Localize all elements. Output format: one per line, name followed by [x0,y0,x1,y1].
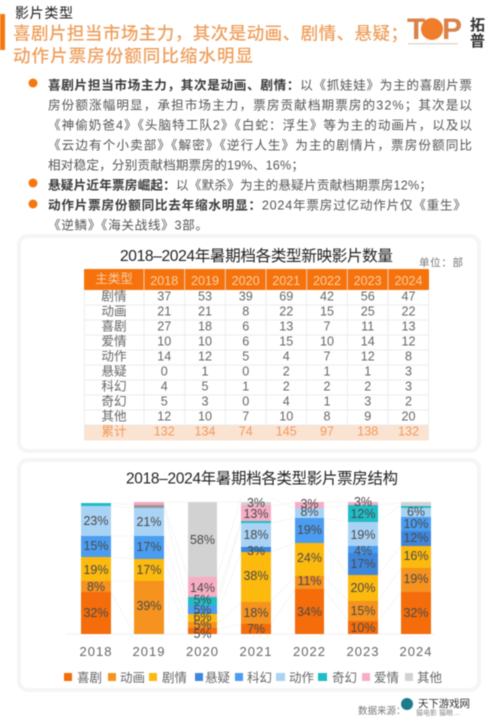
label: unit: 单位：部 [419,256,463,269]
axis: year labels [80,644,432,659]
table: film counts by genre and year: 3 [405,380,412,394]
table: film counts by genre and year: 2 [405,394,412,408]
table: film counts by genre and year: 2 [364,380,371,394]
table: film counts by genre and year: 11 [361,320,374,334]
text block: key findings: 动作片票房份额同比去年缩水明显：2024年票房过亿动作片仅《重生》 [48,198,466,212]
text block: key findings: 《神偷奶爸4》《头脑特工队2》《白蛇：浮生》等为主的动画片，以及以 [48,118,472,132]
table: film counts by genre and year: 15 [320,304,334,318]
table: film counts by genre and year: 其他 [101,410,127,424]
table: film counts by genre and year: 145 [276,424,297,438]
data labels: 14% [190,581,215,595]
data labels: 18% [243,528,269,542]
table: film counts by genre and year: 2020 [232,274,260,288]
table: film counts by genre and year: 9 [364,410,371,424]
table: film counts by genre and year: 悬疑 [101,364,127,378]
table: film counts by genre and year: 5 [242,350,249,364]
table: film counts by genre and year: 8 [405,350,412,364]
table: film counts by genre and year: 37 [157,290,171,304]
table: film counts by genre and year: 138 [357,424,378,438]
table: film counts by genre and year: 25 [361,304,375,318]
table: film counts by genre and year: 1 [323,394,331,408]
table: film counts by genre and year: 主类型 [95,272,133,286]
axis: year labels: 2022 [293,644,326,659]
bar: 2022 [295,502,324,634]
axis: year labels: 2021 [240,644,272,659]
bar: 2023 [348,502,378,634]
panel: box office structure chart [19,460,479,690]
data labels: 3% [354,495,372,509]
data labels: 19% [403,572,429,586]
legend: 爱情 [374,671,399,685]
data labels: 17% [350,557,376,571]
data labels: 32% [403,606,429,620]
header: page title block [0,5,408,66]
table: film counts by genre and year: 20 [401,410,416,424]
bar: 2021 [241,502,271,634]
bar: 2019 [134,502,164,634]
text block: key findings: 相对稳定，分别贡献档期票房的19%、16%； [48,158,304,174]
table: film counts by genre and year: 喜剧 [101,320,127,334]
data labels: 10% [403,517,429,531]
data labels: 5% [193,593,212,607]
data labels: 4% [354,544,372,558]
source note and watermark [358,697,470,717]
table: film counts by genre and year: 8 [323,410,331,424]
axis: year labels: 2019 [133,644,165,659]
table: film counts by genre and year: 12 [157,410,171,424]
table: film counts by genre and year: 0 [242,364,249,378]
table: film counts by genre and year: 2018 [150,274,178,288]
text block: key findings [28,78,472,232]
table: film counts by genre and year: 剧情 [101,290,127,304]
table: film counts by genre and year: 7 [323,350,331,364]
legend [64,670,443,685]
source note and watermark: 猫电影 猫眼… [416,708,460,717]
table: film counts by genre and year: 2 [283,380,290,394]
data labels: 58% [190,533,215,547]
data labels: 6% [193,610,212,624]
legend: 喜剧 [77,671,102,685]
table: film counts by genre and year: 10 [198,410,212,424]
table: film counts by genre and year: 74 [239,424,253,438]
table: film counts by genre and year: 10 [198,334,212,348]
table: film counts by genre and year: 3 [201,394,209,408]
table: film counts by genre and year: 累计 [101,424,127,438]
table: film counts by genre and year: 2 [283,364,290,378]
data labels: 19% [297,523,322,537]
legend: 剧情 [162,671,187,685]
table: film counts by genre and year: 0 [242,394,249,408]
data labels: 16% [403,549,429,563]
header: page title block: 影片类型 [15,5,73,21]
table: film counts by genre and year: 1 [242,380,249,394]
bar: 2020 [188,502,217,634]
chart: stacked bars by year [66,495,435,659]
table: film counts by genre and year: 42 [320,290,334,304]
header: page title block: 动作片票房份额同比缩水明显 [13,46,253,66]
table: film counts by genre and year: 15 [279,334,293,348]
table: film counts by genre and year: 6 [242,334,249,348]
heading: chart title: 2018–2024年暑期档各类型影片票房结构 [126,470,398,488]
table: film counts by genre and year: 10 [157,334,171,348]
data labels: 34% [297,605,322,619]
table: film counts by genre and year: 6 [242,320,249,334]
axis: year labels: 2020 [186,644,219,659]
data labels: 8% [300,505,319,519]
data labels: 19% [83,563,109,577]
icon: TOP logo [407,13,485,50]
panel: new film count table [19,236,479,451]
table: film counts by genre and year: 3 [364,394,371,408]
table: film counts by genre and year: 0 [161,364,168,378]
legend: 动画 [120,671,145,685]
table: film counts by genre and year: 53 [198,290,212,304]
data labels: 15% [83,539,109,553]
table: film counts by genre and year: 动画 [101,304,127,318]
data labels: 23% [83,514,109,528]
text block: key findings: 喜剧片担当市场主力，其次是动画、剧情：以《抓娃娃》为主的喜剧片票 [48,78,472,92]
data labels: 39% [136,599,162,613]
data labels: 20% [350,581,376,595]
data labels: 3% [247,496,265,510]
table: film counts by genre and year [84,269,429,440]
table: film counts by genre and year: 132 [398,424,419,438]
table: film counts by genre and year: 8 [242,304,249,318]
table: film counts by genre and year: 2022 [313,274,341,288]
table: film counts by genre and year: 56 [361,290,375,304]
axis: year labels: 2023 [347,644,379,659]
table: film counts by genre and year: 134 [194,424,216,438]
data labels: 12% [350,507,376,521]
icon: TOP logo: 普 [470,32,485,50]
source note and watermark: 天下游戏网 [418,697,470,710]
header: page title block: 喜剧片担当市场主力，其次是动画、剧情、悬疑； [13,24,408,44]
table: film counts by genre and year: 12 [361,350,375,364]
table: film counts by genre and year: 7 [242,410,249,424]
table: film counts by genre and year: 13 [279,320,293,334]
data labels: 5% [193,627,212,641]
bar: 2024 [401,502,431,634]
icon: TOP logo: P [442,13,462,46]
legend: 悬疑 [205,670,231,685]
text block: key findings: 悬疑片近年票房崛起：以《默杀》为主的悬疑片贡献档期票房12%； [48,178,432,194]
data labels: 12% [403,531,429,545]
table: film counts by genre and year: 科幻 [101,380,127,394]
data labels: 17% [136,540,162,554]
table: film counts by genre and year: 27 [157,320,171,334]
table: film counts by genre and year: 10 [279,410,293,424]
data labels: 19% [350,528,376,542]
source note and watermark: 数据来源： [358,705,406,717]
table: film counts by genre and year: 12 [198,350,212,364]
legend: 其他 [417,671,443,685]
table: film counts by genre and year: 39 [239,290,253,304]
table: film counts by genre and year: 2021 [272,274,300,288]
axis: year labels: 2024 [400,644,432,659]
data labels: 18% [243,606,269,620]
legend: 动作 [289,671,315,685]
table: film counts by genre and year: 1 [323,364,331,378]
data labels: 13% [243,507,269,521]
legend: 科幻 [247,671,272,685]
text block: key findings: 《云边有个小卖部》《解密》《逆行人生》为主的剧情片，票房份额同比 [48,138,472,152]
table: film counts by genre and year: 奇幻 [101,394,127,408]
data labels: 10% [350,621,376,635]
table: film counts by genre and year: 14 [361,334,375,348]
data labels: 38% [243,569,269,583]
bar: 2018 [81,503,111,634]
table: film counts by genre and year: 4 [283,394,290,408]
table: film counts by genre and year: 22 [401,304,416,318]
table: film counts by genre and year: 4 [283,350,290,364]
icon: TOP logo: 拓 [470,16,485,34]
table: film counts by genre and year: 5 [161,394,168,408]
legend: 奇幻 [332,671,357,685]
icon: TOP logo: T [407,13,425,46]
table: film counts by genre and year: 10 [320,334,334,348]
table: film counts by genre and year: 97 [320,424,334,438]
data labels: 24% [297,551,322,565]
table: film counts by genre and year: 5 [201,380,209,394]
table: film counts by genre and year: 爱情 [101,334,127,348]
table: film counts by genre and year: 2024 [394,274,423,288]
table: film counts by genre and year: 动作 [101,350,127,364]
table: film counts by genre and year: 18 [198,320,212,334]
table: film counts by genre and year: 13 [401,320,416,334]
table: film counts by genre and year: 1 [364,364,371,378]
table: film counts by genre and year: 3 [405,364,412,378]
text block: key findings: 《逆鳞》《海关战线》3部。 [48,218,208,232]
table: film counts by genre and year: 47 [401,290,416,304]
table: film counts by genre and year: 132 [154,424,175,438]
data labels: 3% [300,497,319,511]
data labels: 8% [87,580,105,594]
data labels [83,495,429,641]
table: film counts by genre and year: 2023 [354,274,382,288]
data labels: 15% [350,604,376,618]
table: film counts by genre and year: 2 [323,380,331,394]
table: film counts by genre and year: 69 [279,290,293,304]
data labels: 5% [193,603,212,617]
table: film counts by genre and year: 21 [157,304,171,318]
data labels: 5% [193,618,212,632]
data labels: 32% [83,606,109,620]
table: film counts by genre and year: 12 [401,334,416,348]
axis: year labels: 2018 [80,644,112,659]
heading: table title: 2018–2024年暑期档各类型新映影片数量 [120,247,393,265]
data labels: 3% [247,544,265,558]
text block: key findings: 房份额涨幅明显，承担市场主力，票房贡献档期票房的32%；其次是以 [48,98,472,114]
table: film counts by genre and year: 14 [157,350,171,364]
data labels: 7% [247,622,265,636]
table: film counts by genre and year: 4 [161,380,168,394]
table: film counts by genre and year: 1 [201,364,209,378]
data labels: 11% [297,574,322,588]
data labels: 17% [136,563,162,577]
table: film counts by genre and year: 2019 [191,274,219,288]
table: film counts by genre and year: 21 [198,304,212,318]
data labels: 21% [136,515,162,529]
data labels: 6% [407,505,425,519]
table: film counts by genre and year: 22 [279,304,293,318]
table: film counts by genre and year: 7 [323,320,331,334]
